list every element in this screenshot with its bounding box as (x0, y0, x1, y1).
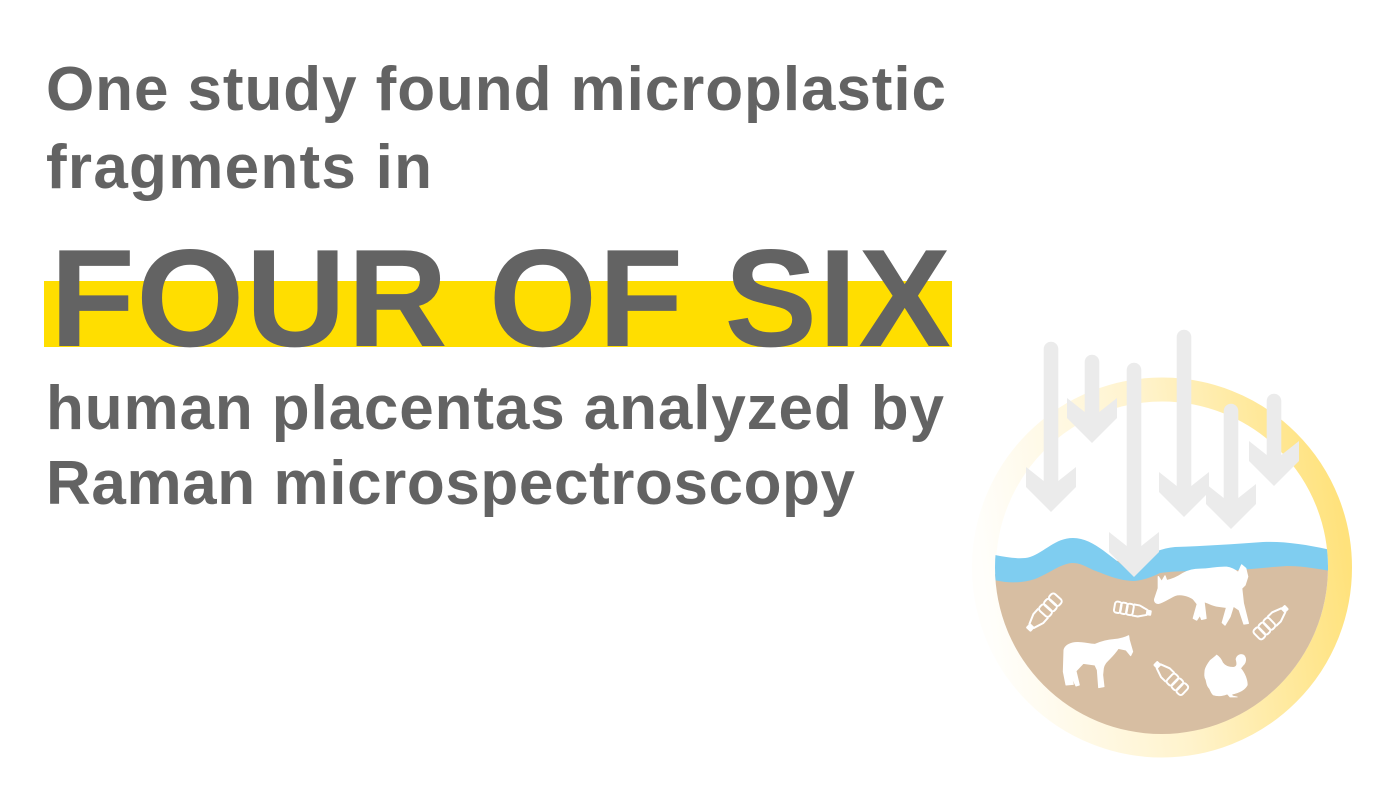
big heading: four of six: FOUR OF SIX (50, 221, 951, 376)
ring (984, 390, 1340, 746)
text block: closing lines (46, 374, 945, 518)
soil (990, 560, 1335, 740)
arrow 2 (1067, 355, 1117, 443)
water (990, 538, 1335, 582)
icon: horse (1063, 636, 1133, 688)
arrow 4 (1159, 330, 1209, 517)
arrow 1 (1026, 342, 1076, 512)
icon: bottle 4 (1151, 658, 1189, 696)
heading: intro lines (46, 55, 946, 202)
icon: goat (1155, 565, 1248, 625)
icon: bottle 3 (1252, 602, 1291, 641)
text block: closing lines: human placentas analyzed by (46, 374, 945, 443)
illustration: contaminated ground circle (984, 330, 1340, 746)
arrow 5 (1206, 404, 1256, 529)
ground scene (990, 538, 1335, 740)
falling arrows (1026, 330, 1299, 577)
heading: intro lines: fragments in (46, 133, 432, 202)
highlight bar (44, 281, 952, 347)
arrow 3 (1109, 363, 1159, 577)
icon: bottle 2 (1114, 601, 1152, 619)
icon: turkey (1205, 655, 1247, 697)
text block: closing lines: Raman microspectroscopy (46, 449, 856, 518)
animals and bottles (1023, 565, 1291, 697)
icon: bottle 1 (1023, 592, 1063, 634)
arrow 6 (1249, 394, 1299, 486)
heading: intro lines: One study found microplastic (46, 55, 946, 124)
